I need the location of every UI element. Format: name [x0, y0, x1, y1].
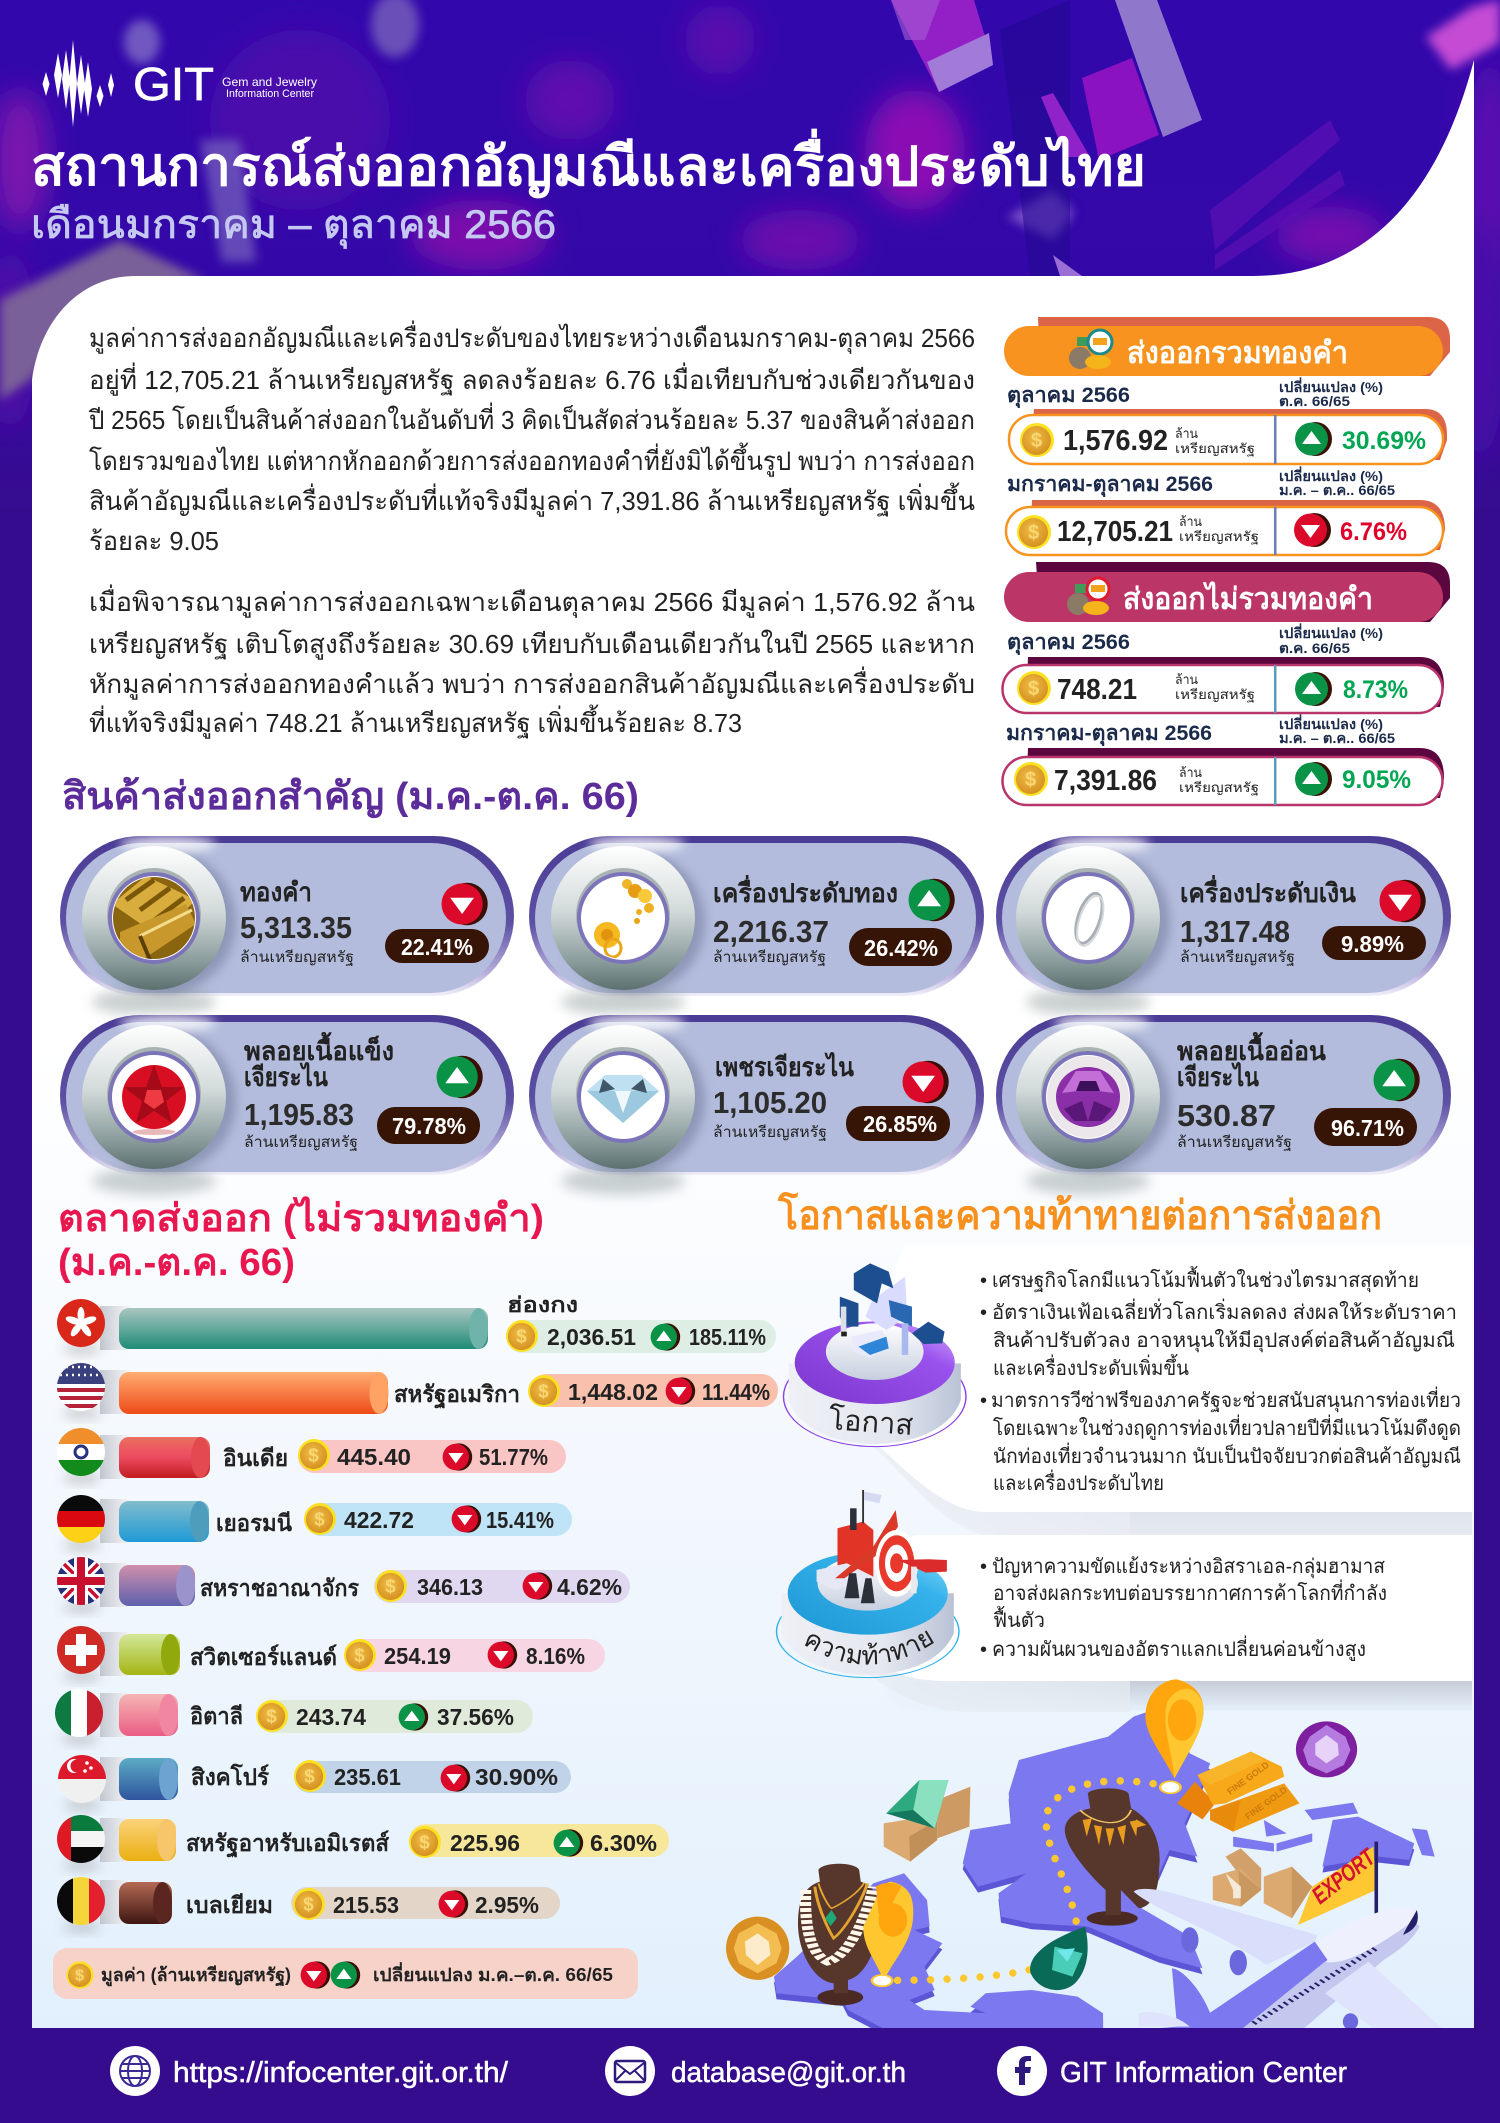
row: United Arab Emirates: สหรัฐอาหรับเอมิเรตส์ — [186, 1830, 390, 1858]
label: opportunity: โอกาส — [828, 1402, 915, 1442]
export flag pole — [1298, 1842, 1378, 1925]
map landmasses — [774, 1703, 1435, 2043]
flag: Singapore — [57, 1754, 107, 1810]
card: gold: 22.41% — [401, 934, 473, 960]
value row: 12,705.21: เหรียญสหรัฐ — [1179, 529, 1259, 545]
row label: January to October 2566: เปลี่ยนแปลง (%) — [1279, 714, 1383, 732]
row label: January to October 2566 — [1006, 714, 1395, 747]
icon: email — [605, 2046, 655, 2096]
text: opportunity bullet points: และเครื่องประดับเพิ่มขึ้น — [993, 1354, 1189, 1380]
flag: United Kingdom — [56, 1556, 106, 1612]
gold bar engraving: FINE GOLD — [1243, 1784, 1289, 1822]
logo: GIT Gem and Jewelry Information Center: Information Center — [226, 88, 314, 100]
text: opportunity bullet points: เศรษฐกิจโลกมีแนวโน้มฟื้นตัวในช่วงไตรมาสสุดท้าย — [992, 1266, 1419, 1293]
row label: October 2566: ตุลาคม 2566 — [1007, 631, 1130, 656]
card: silver jewelry — [996, 836, 1451, 1016]
text: challenge bullet points: ความผันผวนของอัตราแลกเปลี่ยนค่อนข้างสูง — [992, 1635, 1366, 1662]
row label: January to October 2566: ม.ค. – ต.ค.. 66/65 — [1279, 730, 1395, 746]
flag: India — [56, 1427, 106, 1483]
flag: United Arab Emirates — [56, 1814, 106, 1870]
card: precious colored stones: พลอยเนื้อแข็ง — [244, 1031, 394, 1066]
header background with blurred gem facets — [0, 0, 1500, 520]
value row: 7,391.86: เหรียญสหรัฐ — [1179, 780, 1259, 796]
banner: export including gold — [1004, 317, 1450, 376]
row: Italy — [54, 1688, 533, 1744]
text: opportunity bullet points: มาตรการวีซ่าฟรีของภาครัฐจะช่วยสนับสนุนการท่องเที่ยว — [991, 1386, 1461, 1413]
logo: GIT Gem and Jewelry Information Center: Gem and Jewelry — [222, 75, 317, 89]
row label: October 2566: เปลี่ยนแปลง (%) — [1279, 377, 1383, 395]
row: Italy: 243.74 — [296, 1704, 366, 1730]
text: challenge bullet points — [980, 1556, 1387, 1662]
value row: 1,576.92: เหรียญสหรัฐ — [1175, 441, 1255, 457]
value row: 7,391.86: ล้าน — [1179, 765, 1202, 780]
card: semi-precious colored stones — [996, 1015, 1451, 1195]
panel: product cards — [60, 836, 1451, 1195]
card: semi-precious colored stones: เจียระไน — [1177, 1061, 1259, 1092]
row: United Kingdom: สหราชอาณาจักร — [200, 1575, 360, 1601]
card: polished diamonds: เพชรเจียระไน — [715, 1051, 854, 1082]
row: India — [56, 1427, 566, 1483]
text: challenge bullet points: อาจส่งผลกระทบต่อบรรยากาศการค้าโลกที่กำลัง — [993, 1579, 1387, 1605]
row: Switzerland: สวิตเซอร์แลนด์ — [190, 1644, 337, 1670]
card: gold — [60, 836, 514, 1016]
row: Belgium: 215.53 — [333, 1892, 399, 1918]
row: India: 445.40 — [337, 1444, 411, 1470]
card: gold: ทองคำ — [240, 877, 312, 907]
flag: Germany — [56, 1494, 106, 1550]
gem: purple oval — [1296, 1721, 1357, 1777]
flag: Switzerland — [56, 1625, 106, 1681]
legend — [53, 1948, 638, 1999]
text: challenge bullet points: ปัญหาความขัดแย้งระหว่างอิสราเอล-กลุ่มฮามาส — [992, 1556, 1385, 1579]
card: polished diamonds: ล้านเหรียญสหรัฐ — [713, 1124, 827, 1141]
row: Switzerland — [56, 1625, 605, 1681]
row label: October 2566 — [1007, 377, 1383, 409]
row: Italy: 37.56% — [437, 1704, 514, 1730]
illustration: export map with jewelry, gold and airplane — [726, 1679, 1442, 2043]
paragraph 2: หักมูลค่าการส่งออกทองคำแล้ว พบว่า การส่งออกสินค้าอัญมณีและเครื่องประดับ — [89, 666, 975, 700]
row: United States: สหรัฐอเมริกา — [394, 1381, 520, 1409]
map pin south — [863, 1882, 913, 1986]
card: semi-precious colored stones: พลอยเนื้ออ่อน — [1177, 1031, 1326, 1066]
paragraph 2: ที่แท้จริงมีมูลค่า 748.21 ล้านเหรียญสหรัฐ เพิ่มขึ้นร้อยละ 8.73 — [89, 704, 742, 739]
row: United Kingdom — [56, 1556, 630, 1612]
title: สถานการณ์ส่งออกอัญมณีและเครื่องประดับไทย — [31, 128, 1146, 198]
row: Singapore — [57, 1754, 571, 1810]
card: polished diamonds — [529, 1015, 984, 1195]
paragraph 2: เมื่อพิจารณามูลค่าการส่งออกเฉพาะเดือนตุลาคม 2566 มีมูลค่า 1,576.92 ล้าน — [89, 584, 975, 618]
airplane — [1134, 1889, 1442, 2030]
paragraph 1: มูลค่าการส่งออกอัญมณีและเครื่องประดับของไทยระหว่างเดือนมกราคม-ตุลาคม 2566 — [89, 320, 975, 354]
row: Singapore: 235.61 — [334, 1764, 401, 1790]
text: opportunity bullet points: • — [980, 1390, 987, 1412]
row: Germany — [56, 1494, 572, 1550]
panel: export markets bar chart — [54, 1294, 778, 1932]
card: precious colored stones: 1,195.83 — [244, 1097, 354, 1132]
text: challenge bullet points: ฟื้นตัว — [993, 1606, 1045, 1632]
card: polished diamonds: 1,105.20 — [713, 1085, 827, 1120]
row: United Kingdom: 4.62% — [557, 1574, 622, 1600]
row: Singapore: สิงคโปร์ — [191, 1763, 270, 1790]
row label: October 2566 — [1007, 623, 1383, 656]
card: silver jewelry: ล้านเหรียญสหรัฐ — [1180, 949, 1295, 966]
icon: challenge platform with target — [777, 1490, 959, 1678]
value row: 12,705.21: ล้าน — [1179, 514, 1202, 529]
text: opportunity bullet points: • — [980, 1270, 987, 1292]
card: precious colored stones: ล้านเหรียญสหรัฐ — [244, 1134, 358, 1151]
icon: facebook — [997, 2046, 1047, 2096]
row: Belgium: เบลเยียม — [186, 1892, 273, 1918]
route dots — [881, 1781, 1169, 1981]
paragraph 1 — [88, 320, 975, 556]
mannequin with pearl necklace — [798, 1864, 879, 2005]
flag: Italy — [54, 1688, 104, 1744]
subtitle: เดือนมกราคม – ตุลาคม 2566 — [31, 203, 556, 249]
mannequin with gold necklace — [1065, 1788, 1160, 1926]
export flag label: EXPORT — [1307, 1843, 1382, 1910]
row label: October 2566: ตุลาคม 2566 — [1007, 384, 1130, 409]
row: United Arab Emirates: 225.96 — [450, 1830, 520, 1856]
value row: 748.21 — [1002, 657, 1444, 713]
gem: yellow oval — [726, 1917, 789, 1980]
paragraph 1: ร้อยละ 9.05 — [89, 526, 219, 556]
value row: 12,705.21: 6.76% — [1340, 518, 1407, 546]
flag: Hong Kong — [56, 1298, 106, 1354]
card: gold jewelry: เครื่องประดับทอง — [713, 874, 898, 908]
value row: 1,576.92: 1,576.92 — [1063, 425, 1168, 457]
row: United States — [56, 1362, 778, 1418]
row: Singapore: 30.90% — [475, 1764, 558, 1790]
text: opportunity bullet points: โดยเฉพาะในช่วงฤดูการท่องเที่ยวปลายปีที่มีแนวโน้มดึงดูด — [993, 1414, 1461, 1441]
value row: 7,391.86: 7,391.86 — [1054, 765, 1157, 797]
paragraph 1: สินค้าอัญมณีและเครื่องประดับที่แท้จริงมีมูลค่า 7,391.86 ล้านเหรียญสหรัฐ เพิ่มขึ้น — [89, 482, 975, 517]
row: India: 51.77% — [479, 1444, 548, 1470]
row: Italy: อิตาลี — [190, 1703, 243, 1729]
row: Belgium — [56, 1876, 560, 1932]
value row: 12,705.21: 12,705.21 — [1057, 516, 1173, 548]
card: silver jewelry: 9.89% — [1341, 931, 1404, 957]
value row: 1,576.92: 30.69% — [1342, 427, 1426, 455]
paragraph 1: ปี 2565 โดยเป็นสินค้าส่งออกในอันดับที่ 3 คิดเป็นสัดส่วนร้อยละ 5.37 ของสินค้าส่งออก — [88, 402, 975, 435]
row: India: อินเดีย — [223, 1445, 288, 1471]
card: precious colored stones — [60, 1015, 514, 1195]
panel: opportunities — [783, 1245, 1472, 1536]
banner: export excluding gold: ส่งออกไม่รวมทองคำ — [1123, 581, 1373, 616]
heading: export markets — [58, 1196, 544, 1284]
row: United States: 1,448.02 — [568, 1379, 658, 1405]
map pin north — [1145, 1679, 1204, 1793]
card: gold jewelry — [529, 836, 984, 1016]
row: Belgium: 2.95% — [475, 1892, 539, 1918]
card: precious colored stones: เจียระไน — [244, 1061, 328, 1092]
website url: https://infocenter.git.or.th/ — [173, 2057, 509, 2089]
text: challenge bullet points: • — [980, 1639, 987, 1661]
row: Switzerland: 254.19 — [384, 1643, 451, 1669]
heading: key export products: สินค้าส่งออกสำคัญ (ม.ค.-ต.ค. 66) — [62, 776, 639, 818]
row: United Arab Emirates: 6.30% — [590, 1830, 657, 1856]
legend: เปลี่ยนแปลง ม.ค.–ต.ค. 66/65 — [373, 1962, 613, 1985]
paragraph 2 — [89, 584, 975, 739]
value row: 7,391.86 — [1002, 748, 1444, 805]
value row: 1,576.92 — [1009, 409, 1447, 464]
row label: January to October 2566: เปลี่ยนแปลง (%) — [1279, 466, 1383, 484]
row: Switzerland: 8.16% — [526, 1643, 585, 1669]
icon: opportunity platform with puzzle — [783, 1263, 966, 1447]
text: opportunity bullet points: สินค้าปรับตัวลง อาจหนุนให้มีอุปสงค์ต่อสินค้าอัญมณี — [993, 1329, 1455, 1353]
row: United Kingdom: 346.13 — [417, 1574, 483, 1600]
card: semi-precious colored stones: ล้านเหรียญสหรัฐ — [1177, 1134, 1292, 1151]
card: silver jewelry: เครื่องประดับเงิน — [1180, 874, 1356, 908]
value row: 12,705.21 — [1006, 500, 1445, 555]
value row: 1,576.92: ล้าน — [1175, 426, 1198, 441]
gold bar engraving — [1227, 1762, 1286, 1820]
card: gold jewelry: ล้านเหรียญสหรัฐ — [713, 949, 826, 966]
card: semi-precious colored stones: 96.71% — [1331, 1115, 1404, 1141]
value row: 748.21: ล้าน — [1175, 672, 1198, 687]
value row: 748.21: เหรียญสหรัฐ — [1175, 687, 1255, 703]
parcels — [1213, 1848, 1312, 1918]
paragraph 1: อยู่ที่ 12,705.21 ล้านเหรียญสหรัฐ ลดลงร้อยละ 6.76 เมื่อเทียบกับช่วงเดียวกันของ — [89, 362, 975, 396]
paragraph 1: โดยรวมของไทย แต่หากหักออกด้วยการส่งออกทองคำที่ยังมิได้ขึ้นรูป พบว่า การส่งออก — [89, 442, 975, 477]
facebook page name: GIT Information Center — [1060, 2057, 1347, 2089]
row: United Arab Emirates — [56, 1814, 669, 1870]
value row: 7,391.86: 9.05% — [1342, 766, 1411, 794]
row label: January to October 2566: มกราคม-ตุลาคม 2566 — [1007, 473, 1213, 498]
card: gold: 5,313.35 — [240, 910, 352, 945]
panel: challenges — [776, 1490, 1472, 1710]
card: silver jewelry: 1,317.48 — [1180, 914, 1290, 949]
panel: export summary including gold — [1004, 317, 1450, 555]
text: opportunity bullet points: อัตราเงินเฟ้อเฉลี่ยทั่วโลกเริ่มลดลง ส่งผลให้ระดับราคา — [992, 1298, 1457, 1324]
row: Hong Kong: ฮ่องกง — [507, 1294, 578, 1317]
gem: green diamond with box — [884, 1780, 970, 1862]
gold bars — [1177, 1752, 1299, 1832]
row label: January to October 2566 — [1007, 466, 1395, 498]
footer bar — [0, 2028, 1500, 2123]
text: opportunity bullet points — [980, 1266, 1461, 1495]
value row: 748.21: 748.21 — [1057, 674, 1137, 706]
row: Germany: 422.72 — [344, 1507, 414, 1533]
card: semi-precious colored stones: 530.87 — [1177, 1098, 1276, 1133]
card: gold jewelry: 26.42% — [864, 935, 938, 961]
logo: GIT Gem and Jewelry Information Center — [42, 40, 317, 127]
flag: Belgium — [56, 1876, 106, 1932]
icon: website globe — [110, 2046, 160, 2096]
card: gold: ล้านเหรียญสหรัฐ — [240, 949, 354, 966]
row: United States: 11.44% — [702, 1379, 770, 1405]
heading: opportunities and challenges: โอกาสและความท้าทายต่อการส่งออก — [777, 1192, 1382, 1238]
text: opportunity bullet points: • — [980, 1302, 987, 1324]
row: Hong Kong: 185.11% — [689, 1324, 766, 1350]
row: Germany: 15.41% — [486, 1507, 554, 1533]
row: Hong Kong — [56, 1294, 776, 1354]
row label: October 2566: ต.ค. 66/65 — [1279, 640, 1350, 656]
card: precious colored stones: 79.78% — [392, 1113, 466, 1139]
gem: teal teardrop — [1030, 1927, 1088, 1990]
value row: 748.21: 8.73% — [1343, 676, 1408, 704]
row: Germany: เยอรมนี — [216, 1510, 292, 1536]
row label: October 2566: เปลี่ยนแปลง (%) — [1279, 623, 1383, 641]
banner: export including gold: ส่งออกรวมทองคำ — [1127, 337, 1348, 370]
email address: database@git.or.th — [671, 2057, 906, 2089]
flag: United States — [56, 1362, 106, 1418]
row: Hong Kong: 2,036.51 — [547, 1324, 636, 1350]
row label: January to October 2566: มกราคม-ตุลาคม 2566 — [1006, 722, 1212, 747]
heading: export markets: (ม.ค.-ต.ค. 66) — [58, 1242, 295, 1284]
label: challenge: ความท้าทาย — [804, 1630, 934, 1665]
banner: export excluding gold — [1004, 562, 1450, 622]
card: polished diamonds: 26.85% — [863, 1111, 937, 1137]
legend: มูลค่า (ล้านเหรียญสหรัฐ) — [101, 1965, 291, 1987]
heading: export markets: ตลาดส่งออก (ไม่รวมทองคำ) — [58, 1196, 544, 1240]
panel: export excluding gold — [1002, 562, 1450, 805]
logo: GIT Gem and Jewelry Information Center: GIT — [133, 58, 214, 110]
text: opportunity bullet points: นักท่องเที่ยวจำนวนมาก นับเป็นปัจจัยบวกต่อสินค้าอัญมณี — [993, 1442, 1461, 1468]
text: opportunity bullet points: และเครื่องประดับไทย — [993, 1469, 1164, 1495]
card: gold jewelry: 2,216.37 — [713, 914, 829, 949]
row label: January to October 2566: ม.ค. – ต.ค.. 66/65 — [1279, 482, 1395, 498]
row label: October 2566: ต.ค. 66/65 — [1279, 393, 1350, 409]
intro text block — [88, 320, 975, 739]
gold bar engraving: FINE GOLD — [1225, 1759, 1271, 1797]
paragraph 2: เหรียญสหรัฐ เติบโตสูงถึงร้อยละ 30.69 เทียบกับเดือนเดียวกันในปี 2565 และหาก — [89, 629, 975, 660]
text: challenge bullet points: • — [980, 1556, 987, 1578]
